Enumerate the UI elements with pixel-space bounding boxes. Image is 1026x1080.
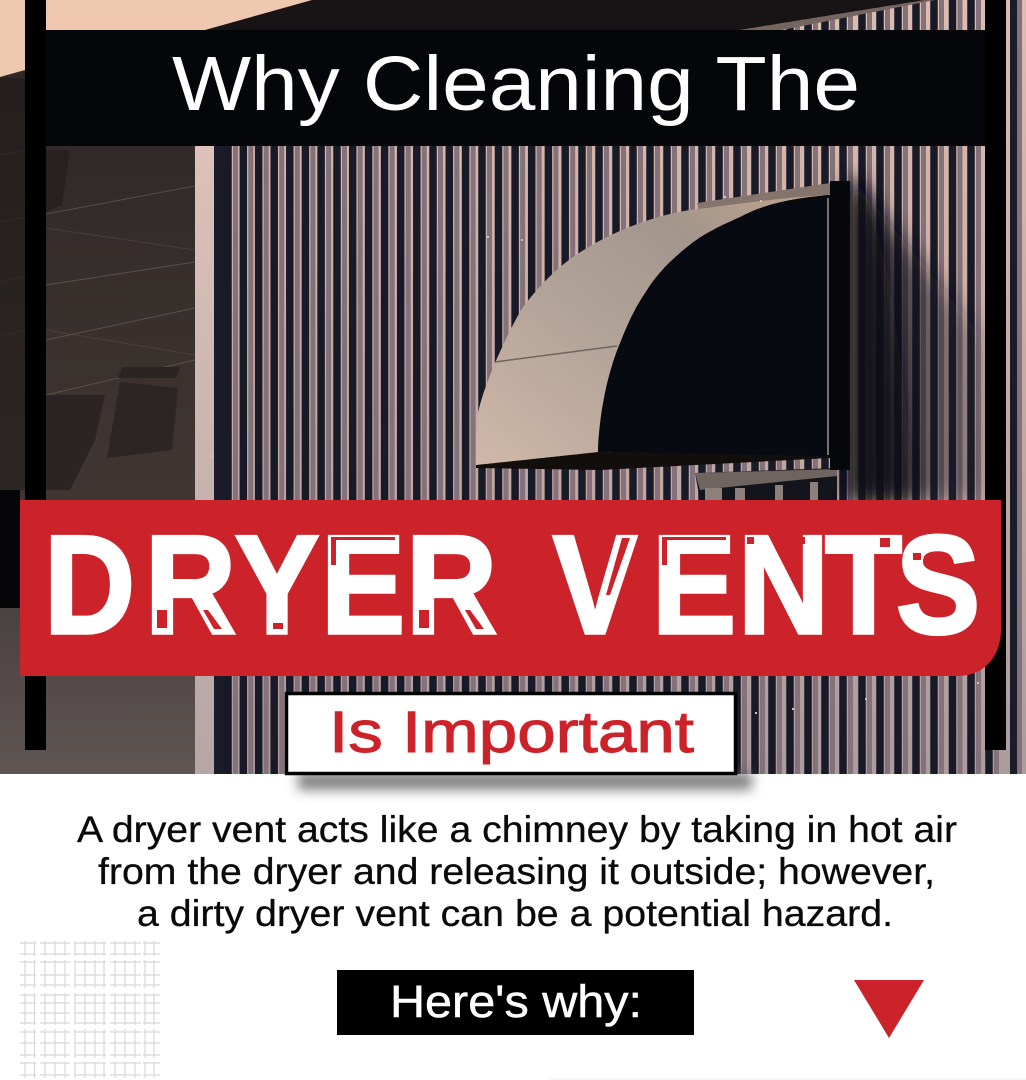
hood edge highlight	[827, 198, 829, 455]
intro paragraph	[77, 809, 957, 934]
here's why label	[337, 970, 694, 1035]
lower flange	[695, 468, 837, 500]
corrugated metal siding	[213, 0, 1026, 774]
background photo: corrugated wall with dryer vent hood	[0, 0, 1026, 774]
hood seam	[495, 346, 617, 362]
title band	[46, 30, 985, 146]
heading: dryer vents: DRYER VENTS	[44, 507, 980, 663]
vent hood underside	[476, 452, 830, 470]
rivets	[212, 196, 979, 714]
left wall reflections	[0, 78, 195, 490]
cream fascia top left	[0, 0, 312, 77]
intro paragraph: A dryer vent acts like a chimney by taking in hot air	[77, 809, 957, 850]
right side frame	[830, 181, 850, 470]
top flange strip	[740, 0, 935, 30]
faint bottom edge	[550, 1078, 1026, 1080]
vent hood light curved surface	[476, 195, 830, 465]
decorative grid pattern	[18, 938, 162, 1080]
upper flange	[697, 182, 837, 214]
pale corner flashing	[195, 146, 214, 774]
red banner with dryer vents heading	[20, 500, 1001, 676]
subheading text: Is Important	[329, 700, 694, 765]
here's why text: Here's why:	[390, 976, 642, 1027]
heading cutout details	[157, 537, 921, 629]
intro paragraph: a dirty dryer vent can be a potential hazard.	[137, 893, 893, 934]
intro paragraph: from the dryer and releasing it outside; however,	[98, 851, 935, 892]
vent hood dark opening	[598, 195, 830, 456]
title line 1: Why Cleaning The	[172, 41, 860, 127]
shadow cast by hood	[850, 175, 985, 500]
right vertical black bar	[985, 0, 1006, 750]
upper dark ceiling area	[205, 0, 925, 30]
red down arrow	[854, 980, 924, 1038]
left wall dark edge	[0, 490, 20, 608]
left vertical black bar	[25, 0, 46, 750]
subheading box	[286, 694, 736, 774]
subheading shadow	[298, 772, 752, 790]
left wall lower panel	[0, 608, 195, 774]
